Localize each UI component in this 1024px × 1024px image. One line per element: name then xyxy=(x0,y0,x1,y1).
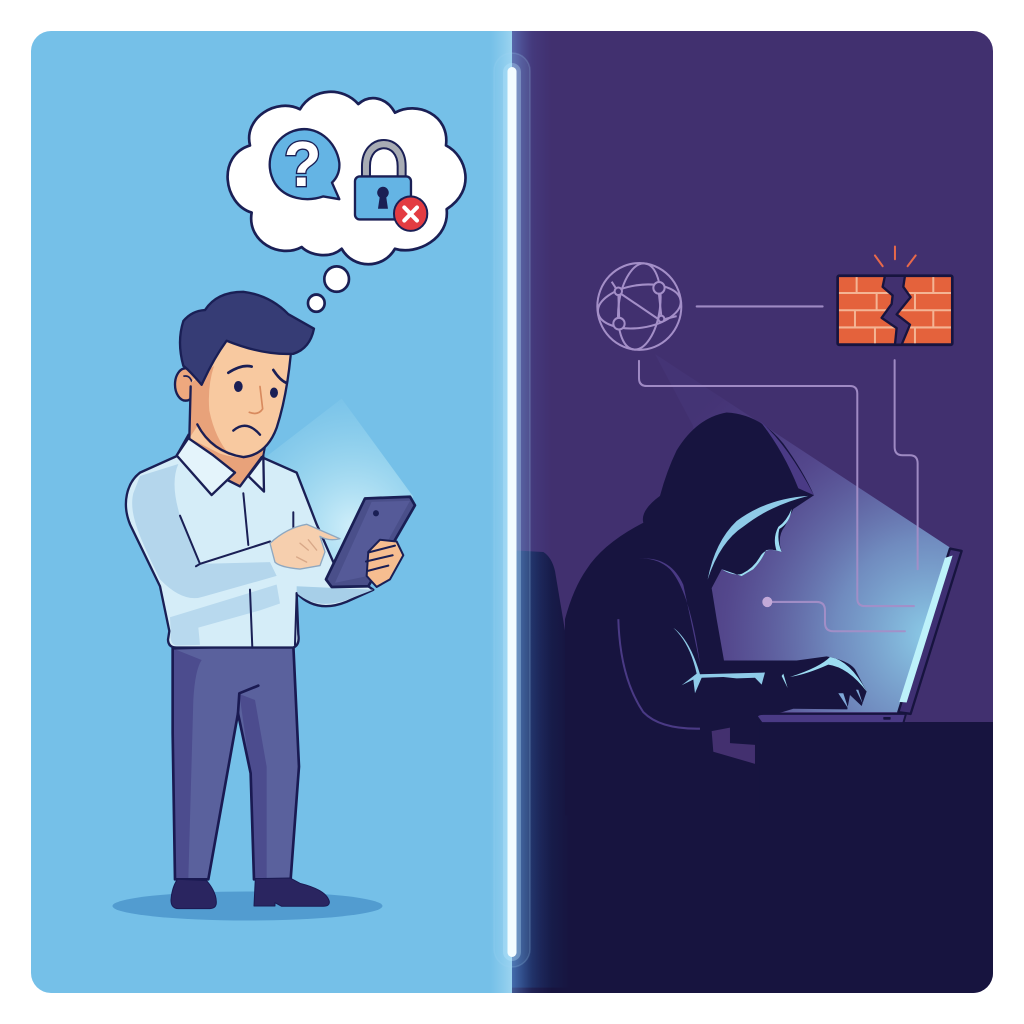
eyebrows xyxy=(228,366,287,383)
trailing bubbles xyxy=(308,266,349,312)
padlock shackle xyxy=(366,144,402,178)
small notch under desk xyxy=(712,728,755,764)
hooded silhouette xyxy=(565,413,867,815)
keyhole xyxy=(377,187,389,209)
man's legs and shoes xyxy=(171,645,329,909)
circuit lines xyxy=(639,306,918,631)
face rim light xyxy=(722,509,792,576)
hacker scene xyxy=(512,247,962,988)
shadow under man xyxy=(112,892,382,920)
eyes xyxy=(234,381,278,398)
ear xyxy=(175,368,196,401)
padlock body xyxy=(355,176,411,219)
laptop light cone xyxy=(655,354,952,712)
hood lit edge xyxy=(760,421,814,495)
circuit node xyxy=(762,597,772,607)
face xyxy=(189,335,291,458)
hair xyxy=(180,292,314,385)
screen light cone xyxy=(260,399,413,581)
holding hand xyxy=(367,540,403,587)
hand finger gaps xyxy=(838,690,863,709)
shirt xyxy=(126,455,373,648)
shirt details xyxy=(180,493,297,648)
question mark: ? xyxy=(284,129,321,200)
back highlight xyxy=(638,559,700,664)
chair xyxy=(512,550,570,988)
collar xyxy=(177,438,264,495)
glowing divider xyxy=(493,31,544,993)
question speech bubble xyxy=(270,129,339,199)
cloud xyxy=(228,92,466,264)
man's upper body, head and phone xyxy=(126,292,415,648)
mouth xyxy=(233,426,260,435)
red error badge xyxy=(394,196,427,231)
laptop xyxy=(757,549,962,723)
broken firewall icon xyxy=(838,276,952,345)
neck xyxy=(177,435,267,493)
phone xyxy=(326,497,415,587)
globe icon xyxy=(595,261,683,352)
thought bubble xyxy=(228,92,466,312)
pointing hand xyxy=(270,524,340,569)
impact sparks xyxy=(875,247,916,266)
nose xyxy=(249,387,263,413)
arm rim light xyxy=(673,628,765,693)
